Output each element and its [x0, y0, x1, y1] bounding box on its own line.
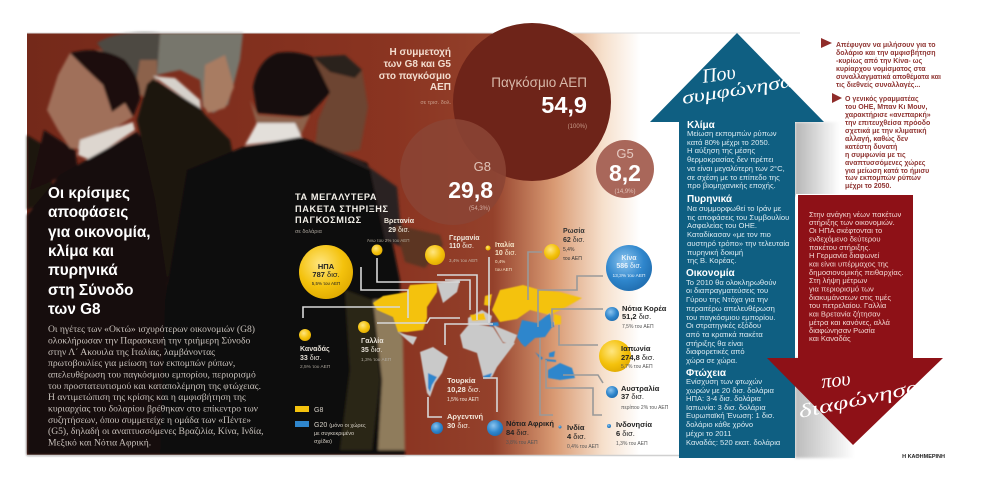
bullet note: UN secretary: κατέστη δυνατή [845, 144, 897, 151]
text: poverty: Καναδάς: 520 εκατ. δολάρια [686, 438, 781, 447]
circle: G5 [596, 140, 654, 198]
intro text block: στην Λ΄ Ακουιλα της Ιταλίας, λαμβάνοντας [48, 347, 215, 358]
label: Turkey [447, 376, 480, 403]
text: disagreements: πακέτου στήριξης. [809, 243, 870, 252]
legend: G8 [314, 407, 323, 414]
bullet note: UN secretary: των εκπομπών ρύπων [845, 175, 921, 182]
legend: σχέδιο) [314, 438, 332, 445]
text: poverty: Ιαπωνία: 3 δισ. δολάρια [686, 403, 766, 412]
label: Japan: 5,7% του ΑΕΠ [621, 364, 653, 370]
label: Italy [495, 241, 517, 272]
label: India: Ινδία [567, 423, 585, 432]
intro text block: του προστατευτισμού και καταπολέμηση της φτώχειας. [48, 381, 261, 392]
heading: stimulus packages: ΤΑ ΜΕΓΑΛΥΤΕΡΑ [295, 192, 377, 202]
label: UK: Βρετανία [384, 218, 415, 225]
text: climate: Κλίμα [687, 120, 716, 131]
label: Russia: Ρωσία [563, 228, 585, 235]
label: Italy: 0,4% [495, 259, 505, 264]
photo background [27, 32, 800, 456]
label: Germany: 110 δισ. [449, 243, 474, 250]
map: grey land [398, 280, 517, 397]
bullet note: UN secretary: του ΟΗΕ, Μπαν Κι Μουν, [845, 104, 927, 111]
map: G20 blue [428, 313, 575, 392]
label: Indonesia [616, 420, 652, 447]
text: disagreements: του πετρελαίου. Γαλλία [809, 301, 887, 310]
label: South Korea: 7,5% του ΑΕΠ [622, 324, 654, 330]
text: climate: σε σχέση με το επίπεδο της [687, 173, 780, 182]
label: South Africa [506, 419, 554, 446]
bullet note: UN secretary: σχετικά με την κλιματική [845, 127, 926, 135]
bullet note: dollar: τις διεθνείς συναλλαγές... [836, 81, 920, 89]
text: nuclear: Πυρηνικά [687, 194, 733, 205]
text: disagreements: ενδεχόμενο δεύτερου [809, 234, 881, 244]
intro text block: πρωτοβουλίες για μείωση των εκπομπών ρύπων, [48, 358, 235, 369]
circle: G8: (54,3%) [469, 206, 490, 212]
text: nuclear: αυστηρό τρόπο» την τελευταία [687, 239, 790, 248]
handwritten: agreed: Που [700, 61, 737, 88]
text: climate: κατά 80% μέχρι το 2050. [687, 138, 770, 147]
label: China: Κίνα [621, 255, 637, 262]
label: Italy: 10 δισ. [495, 250, 517, 257]
text: disagreements: και είναι υπέρμαχος της [809, 260, 889, 268]
text: economy: Γύρου της Ντόχα για την [686, 295, 768, 304]
text: disagreements: διαφώνησαν Ρωσία [809, 326, 876, 335]
legend: G20 (μόνο οι χώρες [314, 422, 366, 429]
label: South Africa: 84 δισ. [506, 428, 529, 437]
label: UK [367, 218, 415, 243]
text: disagreements: Στη λήψη μέτρων [809, 276, 867, 285]
heading: GDP share [379, 47, 451, 106]
bullet note: dollar: δολάριο και την αμφισβήτηση [836, 49, 936, 57]
heading: GDP share: Η συμμετοχή [390, 47, 451, 58]
label: India: 0,4% του ΑΕΠ [567, 444, 599, 450]
bullet note: UN secretary: η συμφωνία με τις [845, 152, 906, 159]
text: economy: Οικονομία [686, 268, 735, 279]
text: economy: στήριξης θα είναι [686, 339, 743, 348]
text: economy: χώρα σε χώρα. [686, 356, 737, 365]
bullet note: UN secretary [832, 93, 931, 190]
label: France: 35 δισ. [361, 347, 383, 354]
text: climate: θερμοκρασίας δεν πρέπει [687, 155, 774, 164]
label: UK: Άνω του 2% του ΑΕΠ [367, 238, 410, 243]
bullet note: UN secretary: μέχρι το 2050. [845, 183, 891, 190]
label: Indonesia: 1,3% του ΑΕΠ [616, 441, 648, 447]
label: South Korea: 51,2 δισ. [622, 312, 651, 321]
text: climate: Η αύξηση της μέσης [687, 146, 755, 155]
title: για οικονομία, [48, 224, 150, 241]
text: poverty: χωρών με 20 δισ. δολάρια [686, 386, 774, 395]
text: poverty: Φτώχεια [686, 368, 727, 379]
title: στη Σύνοδο [48, 282, 133, 299]
source credit: Η ΚΑΘΗΜΕΡΙΝΗ [902, 454, 945, 460]
label: Turkey: Τουρκία [447, 376, 476, 385]
text: disagreements: για περιορισμό των [809, 284, 874, 294]
bullet note: dollar: κυρίαρχου νομίσματος στα [836, 66, 926, 73]
intro text block: ολοκλήρωσαν την Παρασκευή την τριήμερη Σύνοδο [48, 336, 250, 346]
label: Russia: 5,4% [563, 247, 575, 253]
intro text block: Η αντιμετώπιση της κρίσης και η αμφισβήτηση της [48, 392, 246, 403]
label: France [361, 337, 392, 363]
title: Οι κρίσιμες [48, 185, 130, 202]
text: nuclear: Να συμμορφωθεί το Ιράν με [687, 204, 782, 213]
text: nuclear: Ασφαλείας του ΟΗΕ. [687, 221, 757, 230]
label: India [567, 423, 599, 450]
text: disagreements: διακυμάνσεων στις τιμές [809, 293, 891, 302]
bullet note: UN secretary: Ο γενικός γραμματέας [845, 96, 919, 103]
text: economy: από τα κρατικά πακέτα [686, 330, 763, 339]
label: Japan: 274,8 δισ. [621, 353, 654, 362]
circle: world GDP: 54,9 [541, 92, 587, 118]
title [48, 185, 150, 318]
bullet note: UN secretary: χαρακτήρισε «ανεπαρκή» [845, 112, 931, 119]
text: nuclear: τις αποφάσεις του Συμβουλίου [687, 213, 789, 222]
title: των G8 [48, 301, 101, 318]
title: κλίμα και [48, 243, 114, 260]
label: South Africa: Νότια Αφρική [506, 419, 554, 428]
bullet note: dollar: Απέφυγαν να μιλήσουν για το [836, 41, 936, 49]
handwritten: disagreed: διαφώνησαν [797, 374, 935, 423]
text: nuclear: πυρηνική δοκιμή [687, 248, 743, 257]
circle: G8: G8 [474, 159, 491, 174]
label: Australia [621, 384, 669, 411]
text: nuclear [687, 194, 790, 265]
intro text block: κυριαρχίας του δολαρίου βρέθηκαν στο επίκεντρο των [48, 404, 259, 414]
label: China: 13,3% του ΑΕΠ [613, 273, 646, 279]
circle: G5: 8,2 [609, 160, 641, 186]
label: Germany: 3,4% του ΑΕΠ [449, 258, 477, 263]
intro text block: (G5), δηλαδή οι αναπτυσσόμενες Βραζιλία, Κίνα, Ινδία, [48, 426, 264, 437]
intro text block: συζητήσεων, όπου συμμετείχε η ομάδα των «Πέντε» [48, 415, 251, 426]
label: Argentina [447, 412, 484, 430]
label: Australia: περίπου 2% του ΑΕΠ [621, 405, 669, 411]
label: Turkey: 10,28 δισ. [447, 385, 480, 394]
text: economy: Το 2010 θα ολοκληρωθούν [686, 278, 777, 287]
text: poverty: Ευρωπαϊκή Ένωση: 1 δισ. [686, 411, 775, 420]
bullet note: UN secretary: αναπτυσσόμενες χώρες [845, 160, 926, 167]
intro text block: απελευθέρωση του παγκόσμιου εμπορίου, περιορισμό [48, 370, 256, 380]
bullet note: dollar: -κυρίως από την Κίνα- ως [836, 58, 923, 65]
text: disagreements [809, 210, 904, 343]
text: climate: προ βιομηχανικής εποχής. [687, 181, 776, 190]
circle: G8 [400, 119, 506, 225]
text: disagreements: Στην ανάγκη νέων πακέτων [809, 210, 902, 219]
bubbles: yellow G8 [299, 244, 631, 372]
intro text block: Οι ηγέτες των «Οκτώ» ισχυρότερων οικονομιών (G8) [48, 324, 255, 335]
bullet note: dollar: συναλλαγματικά αποθέματα και [836, 73, 941, 81]
circle: world GDP: (100%) [568, 124, 587, 130]
text: poverty: Ενίσχυση των φτωχών [686, 377, 762, 386]
circle: G5: (14,9%) [614, 189, 636, 195]
label: Argentina: 30 δισ. [447, 421, 470, 430]
label: Russia: 62 δισ. [563, 237, 585, 244]
text: climate: να είναι μεγαλύτερη των 2°C, [687, 164, 785, 173]
heading: GDP share: των G8 και G5 [384, 59, 451, 70]
text: nuclear: Καταδίκασαν «με τον πιο [687, 230, 771, 239]
heading: stimulus packages: ΠΑΚΕΤΑ ΣΤΗΡΙΞΗΣ [295, 204, 389, 214]
photo: leaders seen from behind [27, 32, 443, 455]
legend: με συγκεκριμένο [314, 430, 354, 437]
label: France: 1,3% του ΑΕΠ [361, 357, 392, 363]
bullet note: UN secretary: για μείωση κατά το ήμισυ [845, 168, 929, 175]
text: climate [687, 120, 785, 190]
label: Australia: Αυστραλία [621, 384, 660, 393]
text: poverty: ΗΠΑ: 3-4 δισ. δολάρια [686, 394, 762, 403]
text: poverty: μέχρι το 2011 [686, 429, 731, 438]
label: Japan: Ιαπωνία [621, 344, 651, 353]
world map [373, 280, 582, 397]
label: India: 4 δισ. [567, 432, 586, 441]
title: πυρηνικά [48, 262, 118, 279]
heading: GDP share: ΑΕΠ [430, 82, 451, 93]
text: poverty [686, 368, 781, 447]
label: Canada: 2,5% του ΑΕΠ [300, 364, 331, 370]
label: Russia [563, 228, 585, 262]
title: αποφάσεις [48, 204, 128, 221]
label: China: 586 δισ. [616, 263, 642, 270]
label: Japan [621, 344, 654, 370]
label: Indonesia: Ινδονησία [616, 420, 652, 429]
intro text block: Μεξικό και Νότια Αφρική. [48, 438, 151, 448]
handwritten: agreed: συμφώνησαν [680, 69, 804, 108]
label: UK: 29 δισ. [388, 227, 410, 234]
label: Canada [300, 346, 331, 370]
label: South Africa: 3,8% του ΑΕΠ [506, 440, 538, 446]
bullet note: UN secretary: αλλαγή, καθώς δεν [845, 135, 908, 143]
label: Australia: 37 δισ. [621, 392, 644, 401]
grey shadows behind arrows [795, 122, 855, 458]
handwritten: agreed [680, 61, 804, 108]
circle: G5: G5 [616, 146, 634, 161]
label: Italy: Ιταλία [495, 241, 515, 249]
heading: stimulus packages [295, 192, 389, 235]
label: Turkey: 1,5% του ΑΕΠ [447, 397, 479, 403]
bubbles: blue G20 [431, 245, 652, 436]
label: USA [312, 262, 340, 286]
legend [295, 406, 366, 445]
bullet note: UN secretary: την επιτευχθείσα πρόοδο [845, 120, 930, 127]
text: poverty: δολάριο κάθε χρόνο [686, 420, 753, 429]
label: Russia: του ΑΕΠ [563, 256, 582, 262]
handwritten: disagreed: που [820, 368, 852, 393]
intro text block [48, 324, 264, 448]
text: economy: του παγκόσμιου εμπορίου. [686, 313, 775, 322]
text: disagreements: Η Γερμανία διαφωνεί [809, 251, 880, 260]
text: disagreements: Οι ΗΠΑ σκέφτονται το [809, 226, 882, 235]
bullet note: dollar [821, 38, 941, 89]
arrow: agreed (blue) [650, 33, 824, 458]
heading: GDP share: στο παγκόσμιο [379, 71, 451, 82]
label: France: Γαλλία [361, 337, 384, 345]
text: disagreements: στήριξης των οικονομιών. [809, 218, 895, 227]
text: economy: Οι στρατηγικές εξόδου [686, 321, 761, 330]
label: USA: ΗΠΑ [318, 262, 335, 271]
text: climate: Μείωση εκπομπών ρύπων [687, 129, 777, 138]
label: Germany [449, 235, 480, 263]
label: South Korea: Νότια Κορέα [622, 304, 667, 313]
circle: world GDP [453, 23, 611, 181]
circle: world GDP: Παγκόσμιο ΑΕΠ [491, 75, 587, 90]
label: Indonesia: 6 δισ. [616, 429, 635, 438]
label: USA: 5,5% του ΑΕΠ [312, 281, 340, 286]
text: disagreements: και Καναδάς [809, 334, 851, 343]
label: Canada: Καναδάς [300, 346, 330, 353]
text: disagreements: μέτρα και κανόνες, αλλά [809, 318, 891, 327]
map: G8 yellow [373, 283, 582, 332]
circle: G8: 29,8 [448, 177, 493, 203]
text: disagreements: και Βρετανία ζήτησαν [809, 310, 881, 318]
label: Argentina: Αργεντινή [447, 412, 484, 421]
arrow: disagreed (red) [758, 194, 943, 445]
label: Germany: Γερμανία [449, 235, 480, 242]
heading: GDP share: σε τρισ. δολ. [420, 100, 451, 106]
connector lines [303, 252, 603, 417]
text: economy: διαφορετικές από [686, 347, 745, 356]
label: USA: 787 δισ. [312, 270, 340, 279]
label: Italy: του ΑΕΠ [495, 267, 512, 272]
label: South Korea [622, 304, 667, 330]
text: nuclear: της Β. Κορέας. [687, 256, 736, 265]
text: economy: περαιτέρω απελευθέρωση [686, 304, 775, 313]
text: disagreements: δημοσιονομικής πειθαρχίας. [809, 268, 904, 277]
label: China [613, 255, 646, 279]
heading: stimulus packages: σε δολάρια [295, 228, 323, 235]
handwritten: disagreed [797, 368, 935, 423]
text: economy [686, 268, 777, 365]
text: economy: οι διαπραγματεύσεις του [686, 286, 768, 295]
label: Canada: 33 δισ. [300, 355, 322, 362]
heading: stimulus packages: ΠΑΓΚΟΣΜΙΩΣ [295, 215, 362, 225]
